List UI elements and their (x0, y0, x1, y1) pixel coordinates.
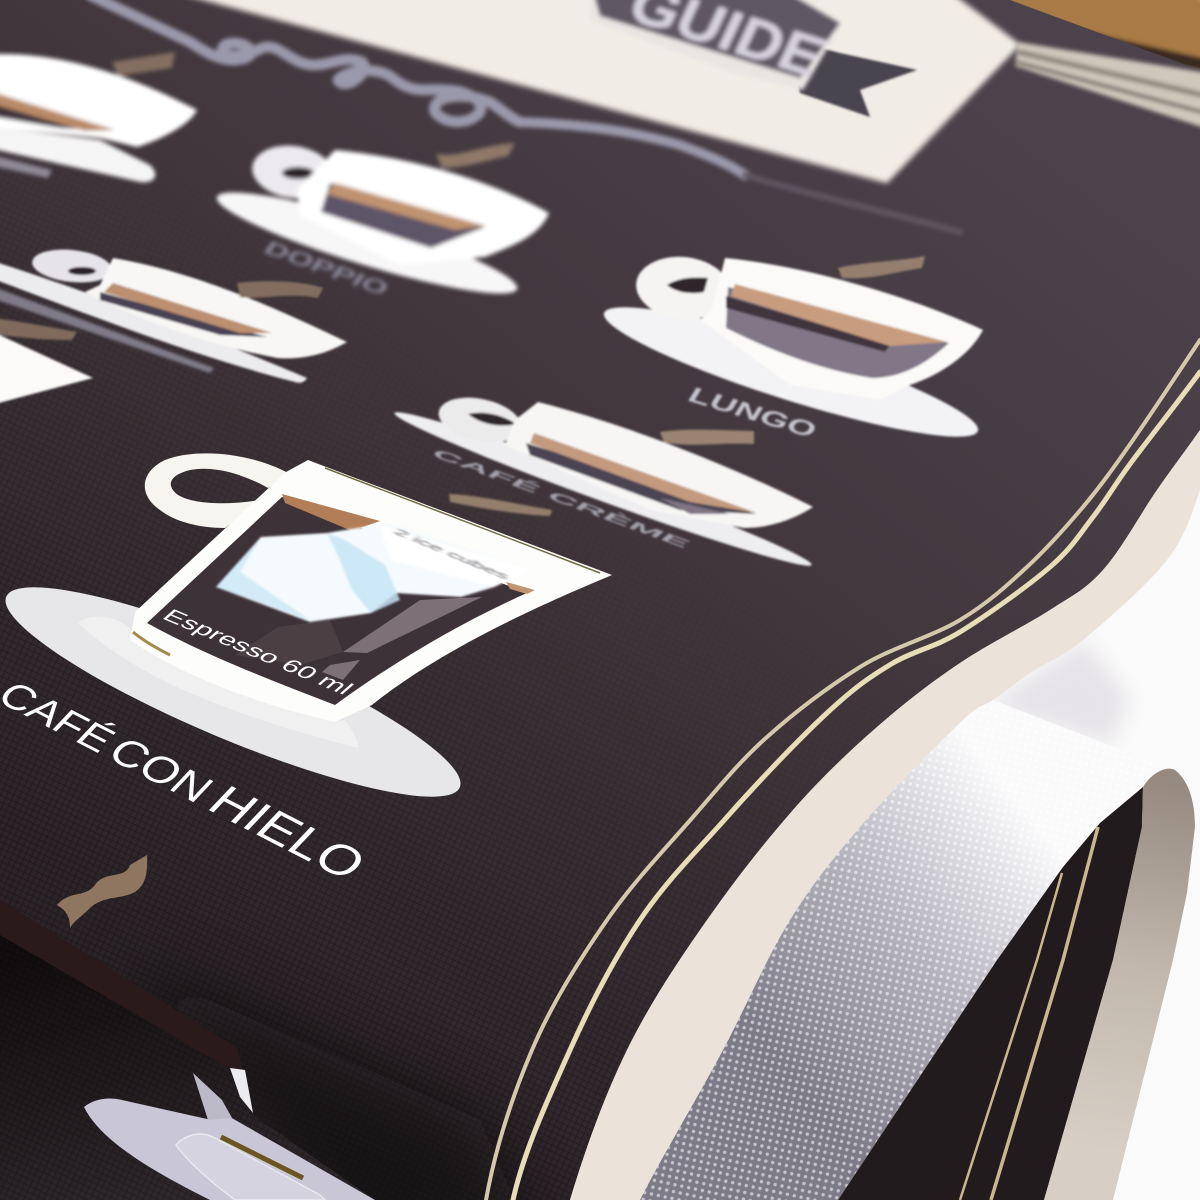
cream poster border (570, 430, 1200, 1200)
lower cup handle sliver (193, 1073, 232, 1120)
lower left poster layer (0, 917, 375, 1200)
cup: small left edge (0, 316, 93, 408)
rolled panel gold lines (960, 827, 1098, 1200)
drink name: cafe con hielo: HIELO (198, 776, 377, 889)
saucer inner ring (78, 617, 358, 748)
shadow near fold (120, 960, 540, 1200)
soft shadow under poster edge (985, 640, 1130, 745)
crema right (506, 582, 535, 594)
ribbon banner (790, 40, 917, 117)
coffee window (147, 497, 527, 705)
wooden frame corner (950, 0, 1200, 76)
label: espresso 60 ml: Espresso 60 ml (157, 606, 358, 698)
cream title card (140, 0, 1016, 180)
cup: lungo (596, 252, 986, 458)
crema (282, 494, 380, 531)
cup: cafe con hielo (0, 453, 612, 831)
cup: cafe creme: CAFÉ CRÈME (428, 447, 694, 550)
fabric mesh texture (0, 306, 767, 1200)
cup: espresso (top left) (0, 52, 197, 182)
cup base gold (133, 632, 170, 655)
espresso shadow (235, 620, 343, 665)
cup: third row left (0, 246, 347, 383)
cup: lungo: LUNGO (683, 382, 822, 442)
saucer (0, 553, 478, 831)
cup: cafe creme (390, 391, 816, 576)
cup body (130, 460, 612, 722)
ice cubes (216, 523, 530, 622)
lower cup gold bar (221, 1137, 303, 1178)
espresso column (343, 597, 482, 653)
lower cup saucer (84, 1068, 375, 1200)
drink name: cafe con hielo: CON (99, 730, 222, 811)
lower cup ring (176, 1134, 325, 1200)
cup: doppio: DOPPIO (259, 237, 393, 300)
script heading with flourish (90, 0, 960, 232)
gold border lines (486, 340, 1200, 1200)
handle (145, 453, 290, 528)
label: 2 ice cubes: 2 ice cubes (391, 527, 512, 581)
cup: doppio (210, 141, 549, 310)
steam above cafe con hielo (57, 855, 147, 928)
espresso column lower (322, 660, 360, 680)
rolled panel cream border (1044, 769, 1195, 1200)
rolled dark back panel (838, 787, 1143, 1200)
poster reverse side mesh (640, 700, 1173, 1200)
top right stripes (1015, 42, 1200, 133)
lower cup white sliver (230, 1068, 253, 1113)
rim gold line (325, 468, 600, 573)
fold band (0, 900, 243, 1072)
